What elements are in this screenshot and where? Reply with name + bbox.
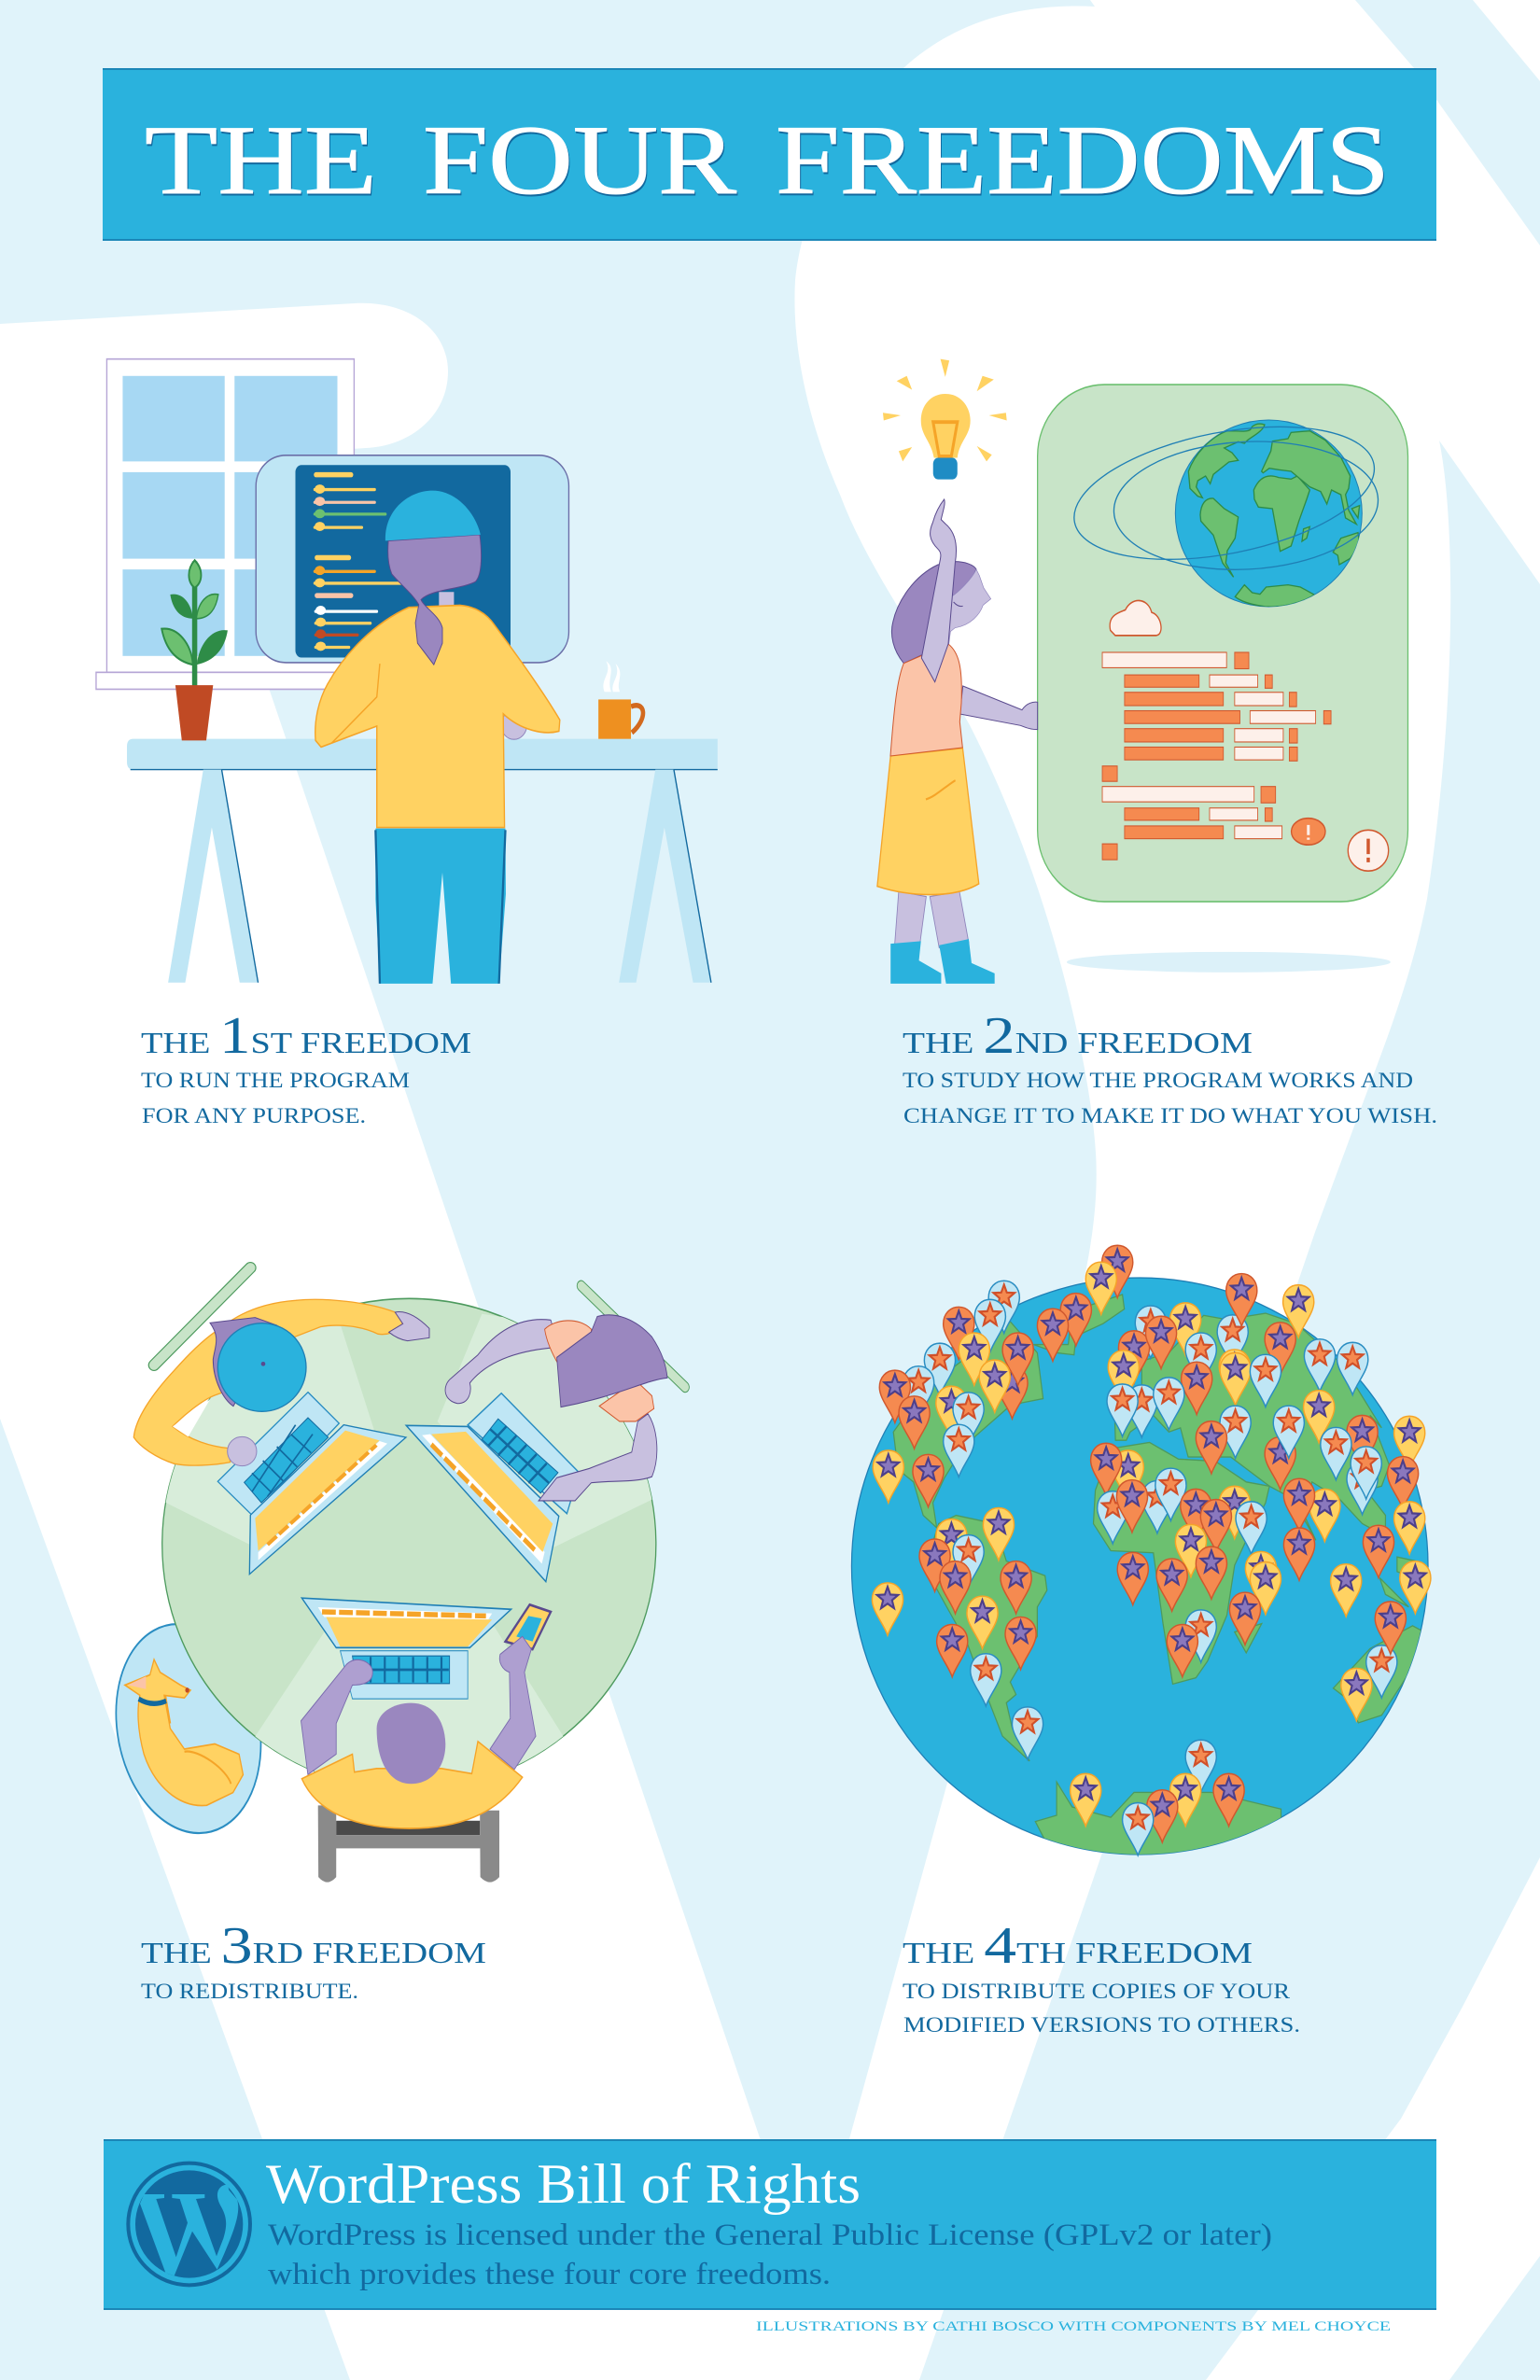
text block: fourth freedom: THE 4TH FREEDOM	[903, 1917, 1253, 1975]
chair back	[154, 1267, 250, 1365]
light bulb	[883, 359, 1007, 480]
title text: THE	[145, 105, 377, 215]
floor shadow	[1067, 952, 1391, 973]
table	[161, 1297, 657, 1773]
blue cap	[217, 1323, 306, 1411]
footer banner	[104, 2139, 1436, 2310]
text block: first freedom: THE 1ST FREEDOM	[141, 1007, 471, 1065]
text block: first freedom	[141, 1007, 471, 1127]
text block: fourth freedom: TO DISTRIBUTE COPIES OF YOUR	[903, 1980, 1291, 2003]
continents	[893, 1295, 1424, 1866]
code blocks	[1102, 652, 1331, 860]
plant	[161, 560, 228, 740]
title banner	[103, 68, 1436, 241]
gap between arm and body	[173, 1399, 210, 1436]
text block: second freedom: CHANGE IT TO MAKE IT DO WHAT YOU WISH.	[903, 1104, 1437, 1127]
panel: third freedom illustration	[91, 1283, 685, 1883]
text block: fourth freedom: MODIFIED VERSIONS TO OTHERS.	[903, 2013, 1300, 2037]
text block: second freedom	[903, 1007, 1437, 1127]
footer description: WordPress is licensed under the General Public License (GPLv2 or later)	[268, 2219, 1272, 2252]
globe with orbits	[1073, 420, 1379, 607]
text block: third freedom	[141, 1917, 486, 2003]
text block: second freedom: THE 2ND FREEDOM	[903, 1007, 1253, 1065]
panel: second freedom illustration	[877, 359, 1407, 984]
dog on bed	[91, 1594, 287, 1863]
globe	[851, 1278, 1428, 1855]
location pins	[872, 1245, 1431, 1855]
code lines on screen	[315, 475, 407, 651]
text block: first freedom: FOR ANY PURPOSE.	[142, 1104, 366, 1127]
text block: fourth freedom	[903, 1917, 1300, 2037]
green display panel	[1038, 385, 1407, 902]
chair backs	[581, 1286, 685, 1387]
person at desk	[315, 491, 560, 984]
desk	[127, 739, 718, 983]
footer description: which provides these four core freedoms.	[268, 2258, 831, 2291]
laptop three	[301, 1598, 511, 1699]
laptop two	[406, 1393, 579, 1582]
footer heading: WordPress Bill of Rights	[266, 2153, 861, 2215]
chair back fill	[154, 1267, 250, 1365]
woman pointing: upper body	[890, 499, 1038, 756]
illustration credits: ILLUSTRATIONS BY CATHI BOSCO WITH COMPONENTS BY MEL CHOYCE	[756, 2319, 1391, 2334]
footer description	[268, 2219, 1272, 2291]
text block: third freedom: TO REDISTRIBUTE.	[141, 1980, 358, 2003]
hands	[228, 1312, 429, 1466]
text block: third freedom: THE 3RD FREEDOM	[141, 1917, 486, 1975]
laptop one	[217, 1393, 406, 1575]
title text	[145, 105, 1390, 215]
person one arms	[133, 1299, 403, 1465]
icon: WordPress logo	[128, 2163, 250, 2285]
chair back highlight	[581, 1286, 685, 1387]
warning badges	[1292, 819, 1389, 871]
hair	[210, 1318, 277, 1407]
title text: FREEDOMS	[776, 105, 1390, 215]
coffee mug	[598, 661, 643, 739]
text block: second freedom: TO STUDY HOW THE PROGRAM WORKS AND	[903, 1069, 1413, 1092]
text block: first freedom: TO RUN THE PROGRAM	[141, 1069, 410, 1092]
monitor	[256, 455, 568, 663]
panel: fourth freedom illustration, globe with pins	[851, 1245, 1431, 1866]
woman: skirt, legs and boots	[877, 749, 995, 984]
cloud	[1110, 600, 1161, 636]
person three, seated bottom with phone	[301, 1604, 551, 1883]
title text: FOUR	[423, 105, 736, 215]
window	[96, 359, 354, 689]
panel: first freedom illustration	[96, 359, 718, 984]
person two, seated top right	[445, 1315, 667, 1501]
cap button	[261, 1362, 265, 1366]
person one and laptop one	[133, 1267, 429, 1575]
